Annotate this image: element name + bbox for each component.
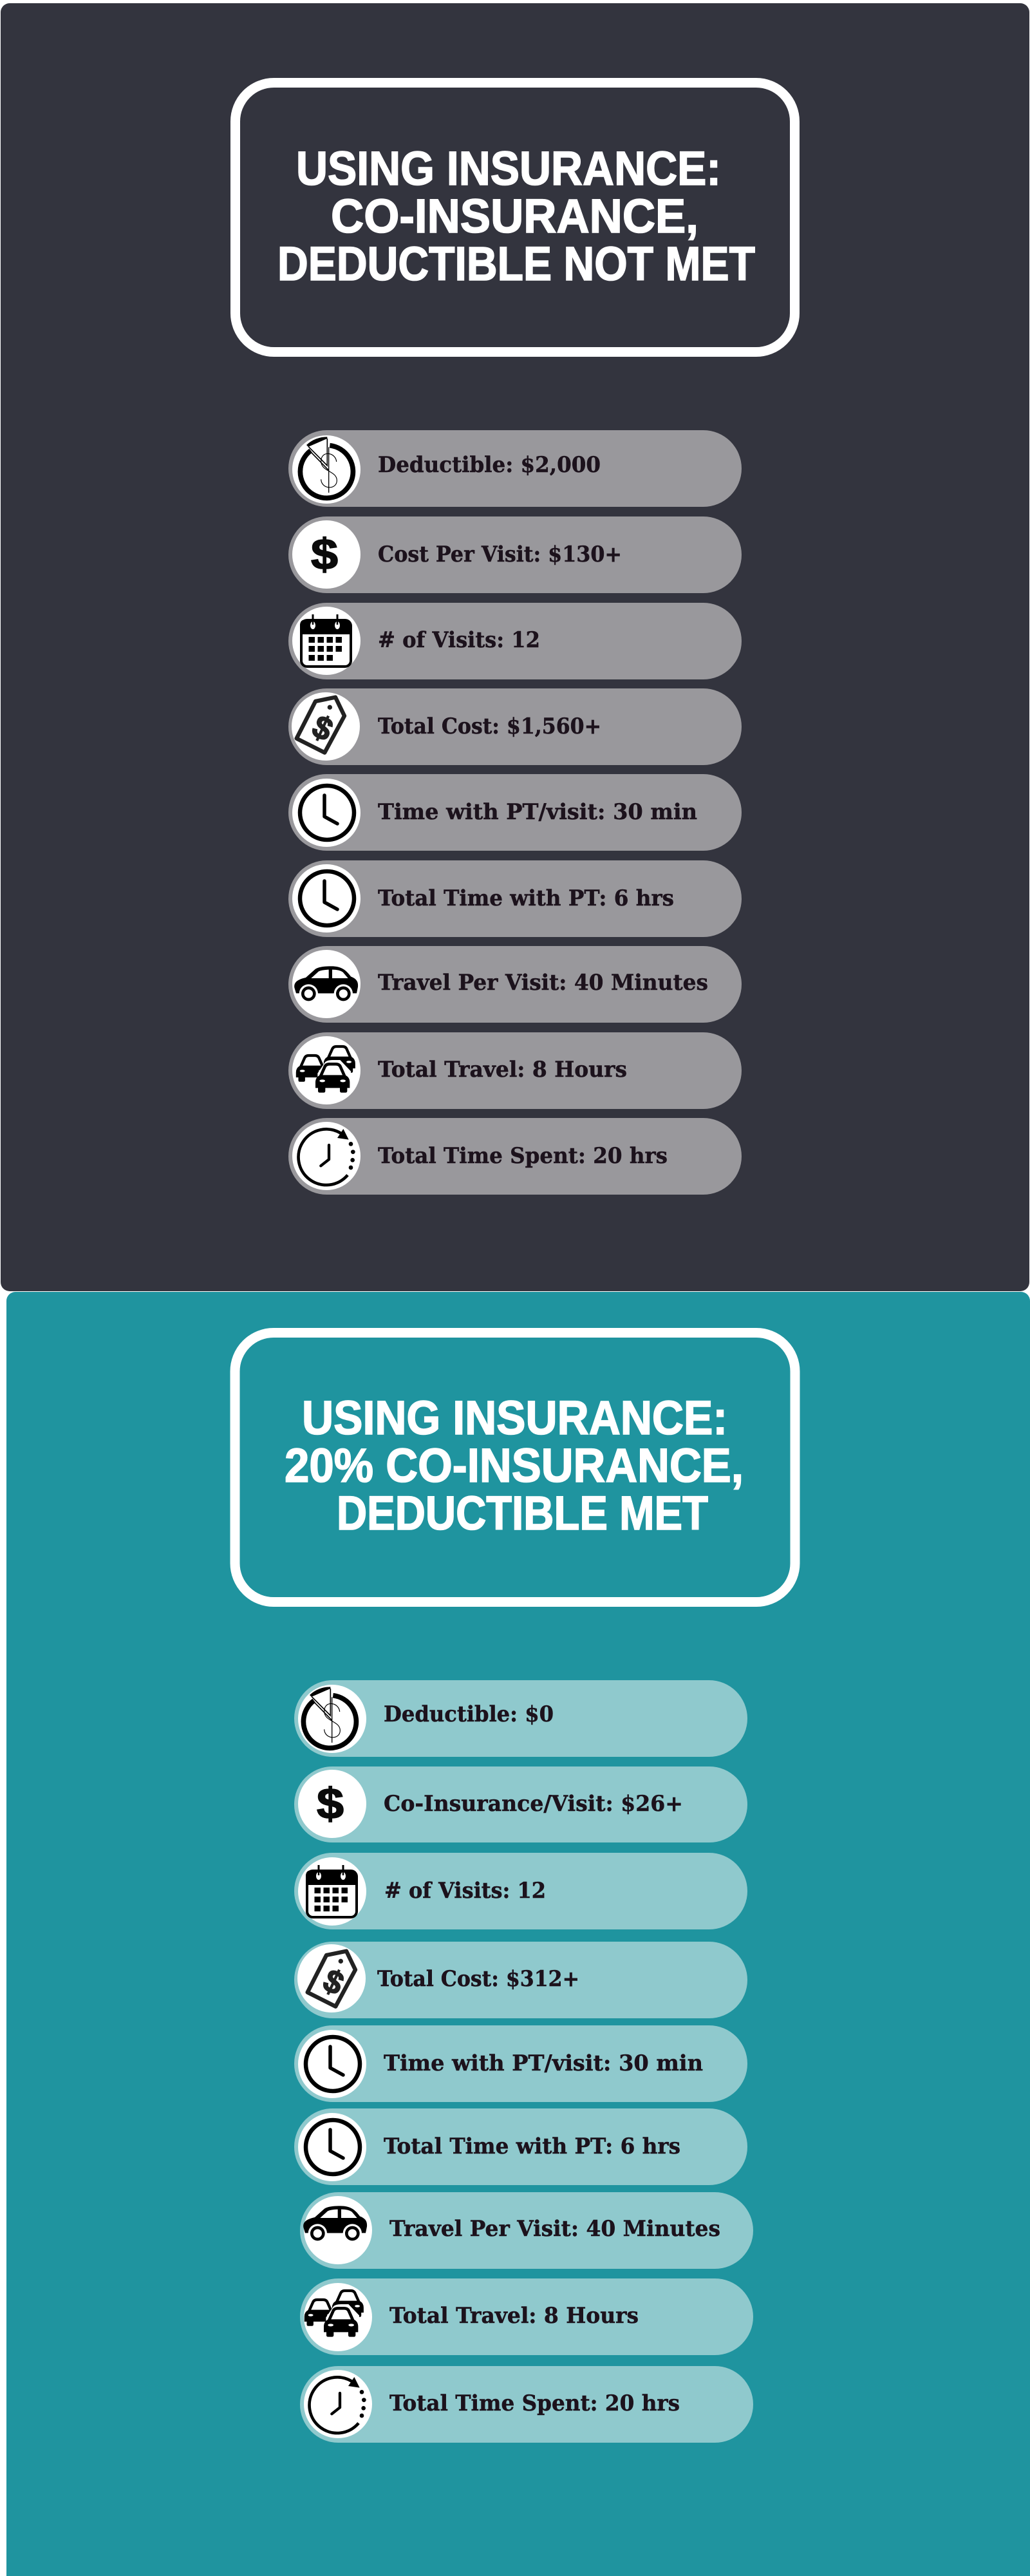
icon: calendar <box>300 614 351 667</box>
pill <box>294 2108 747 2185</box>
label: Deductible: $0 <box>384 1701 554 1727</box>
pill <box>288 860 742 937</box>
label: Time with PT/visit: 30 min <box>378 799 697 825</box>
label: Co-Insurance/Visit: $26+ <box>384 1791 683 1817</box>
label: Travel Per Visit: 40 Minutes <box>389 2216 720 2242</box>
icon: calendar <box>306 1865 357 1917</box>
row: travel per visit <box>288 946 742 1023</box>
row: total cost <box>294 1942 747 2018</box>
label: Cost Per Visit: $130+ <box>378 542 622 567</box>
icon: clock <box>306 2120 360 2174</box>
icon: clock <box>306 2037 360 2091</box>
row: co-insurance per visit <box>294 1766 747 1842</box>
icon circle <box>292 435 360 504</box>
title box: dark panel <box>236 82 794 352</box>
icon circle <box>292 692 360 761</box>
row: total travel <box>288 1032 742 1109</box>
pill <box>300 2192 753 2269</box>
icon: clock <box>300 786 354 840</box>
icon circle <box>297 1944 366 2012</box>
icon: price tag <box>308 1951 355 2007</box>
panel background: teal <box>6 1292 1030 2576</box>
label: Total Travel: 8 Hours <box>378 1057 627 1083</box>
icon: dollar sign: $ <box>317 1779 344 1828</box>
title frame <box>236 82 794 352</box>
title frame <box>235 1333 795 1602</box>
icon: dollar sign: $ <box>311 530 338 579</box>
icon circle <box>292 1036 360 1104</box>
icon: deductible coin <box>300 437 353 498</box>
title: using insurance, deductible not met: DEDUCTIBLE NOT MET <box>277 237 755 290</box>
icon: price tag: $ <box>318 1962 350 2002</box>
pill <box>288 1118 742 1195</box>
label: Time with PT/visit: 30 min <box>384 2050 703 2076</box>
title: using insurance, deductible not met: CO-INSURANCE, <box>331 189 698 243</box>
row: deductible <box>294 1680 747 1757</box>
pill <box>300 2278 753 2355</box>
pill <box>288 516 742 593</box>
label: Total Time with PT: 6 hrs <box>384 2134 680 2159</box>
label: # of Visits: 12 <box>384 1878 546 1904</box>
icon: clock with arrow <box>299 1129 355 1185</box>
label: Total Time Spent: 20 hrs <box>378 1143 668 1169</box>
row: travel per visit <box>300 2192 753 2269</box>
label: Total Time Spent: 20 hrs <box>389 2391 680 2416</box>
icon: clock <box>300 871 354 925</box>
pill <box>294 1766 747 1842</box>
label: Total Time with PT: 6 hrs <box>378 886 674 911</box>
pill <box>300 2366 753 2443</box>
pill <box>294 2025 747 2102</box>
label: Total Travel: 8 Hours <box>389 2303 639 2329</box>
icon circle <box>304 2196 372 2264</box>
panel: deductible met <box>6 1292 1030 2576</box>
icon circle <box>292 950 360 1018</box>
icon circle <box>298 2030 366 2098</box>
icon circle <box>304 2283 372 2351</box>
label: # of Visits: 12 <box>378 627 540 653</box>
title: using insurance, deductible met: USING INSURANCE: <box>302 1391 727 1444</box>
icon circle <box>292 520 360 589</box>
icon: traffic <box>296 1045 355 1093</box>
title: using insurance, deductible not met: USING INSURANCE: <box>296 142 721 195</box>
pill <box>294 1680 747 1757</box>
icon circle <box>298 1685 366 1753</box>
icon circle <box>298 1770 366 1838</box>
icon: deductible coin <box>303 1687 356 1748</box>
icon circle <box>304 2370 372 2438</box>
row: number of visits <box>294 1853 747 1929</box>
row: deductible <box>288 430 742 507</box>
pill <box>294 1853 747 1929</box>
icon: car <box>303 2206 367 2243</box>
row: total time spent <box>288 1118 742 1195</box>
row: cost per visit <box>288 516 742 593</box>
label: Deductible: $2,000 <box>378 452 601 478</box>
label: Travel Per Visit: 40 Minutes <box>378 970 708 996</box>
icon circle <box>292 1122 360 1190</box>
title: using insurance, deductible met <box>285 1391 744 1540</box>
label: Total Cost: $312+ <box>377 1966 579 1992</box>
icon: clock with arrow <box>310 2377 366 2433</box>
row: total cost <box>288 688 742 765</box>
row: total time spent <box>300 2366 753 2443</box>
label: Total Cost: $1,560+ <box>378 714 601 739</box>
icon circle <box>292 779 360 847</box>
title: using insurance, deductible met: DEDUCTIBLE MET <box>337 1486 708 1540</box>
icon: price tag <box>297 697 344 753</box>
panel: deductible not met <box>1 3 1029 1291</box>
row: total time with PT <box>288 860 742 937</box>
icon: car <box>294 966 358 1003</box>
title: using insurance, deductible met: 20% CO-INSURANCE, <box>285 1439 744 1492</box>
row: time with PT per visit <box>288 774 742 851</box>
title box: teal panel <box>235 1333 795 1602</box>
icon: traffic <box>304 2289 364 2337</box>
pill <box>288 430 742 507</box>
icon: price tag: $ <box>307 708 339 748</box>
row: total time with PT <box>294 2108 747 2185</box>
row: time with PT per visit <box>294 2025 747 2102</box>
icon circle <box>298 2113 366 2181</box>
pill <box>294 1942 747 2018</box>
pill <box>288 688 742 765</box>
pill <box>288 774 742 851</box>
pill <box>288 946 742 1023</box>
row: number of visits <box>288 603 742 679</box>
title: using insurance, deductible not met <box>277 142 755 290</box>
row: total travel <box>300 2278 753 2355</box>
pill <box>288 603 742 679</box>
icon circle <box>298 1857 366 1926</box>
panel background: dark <box>1 3 1029 1291</box>
pill <box>288 1032 742 1109</box>
icon circle <box>292 864 360 933</box>
icon circle <box>292 607 360 675</box>
